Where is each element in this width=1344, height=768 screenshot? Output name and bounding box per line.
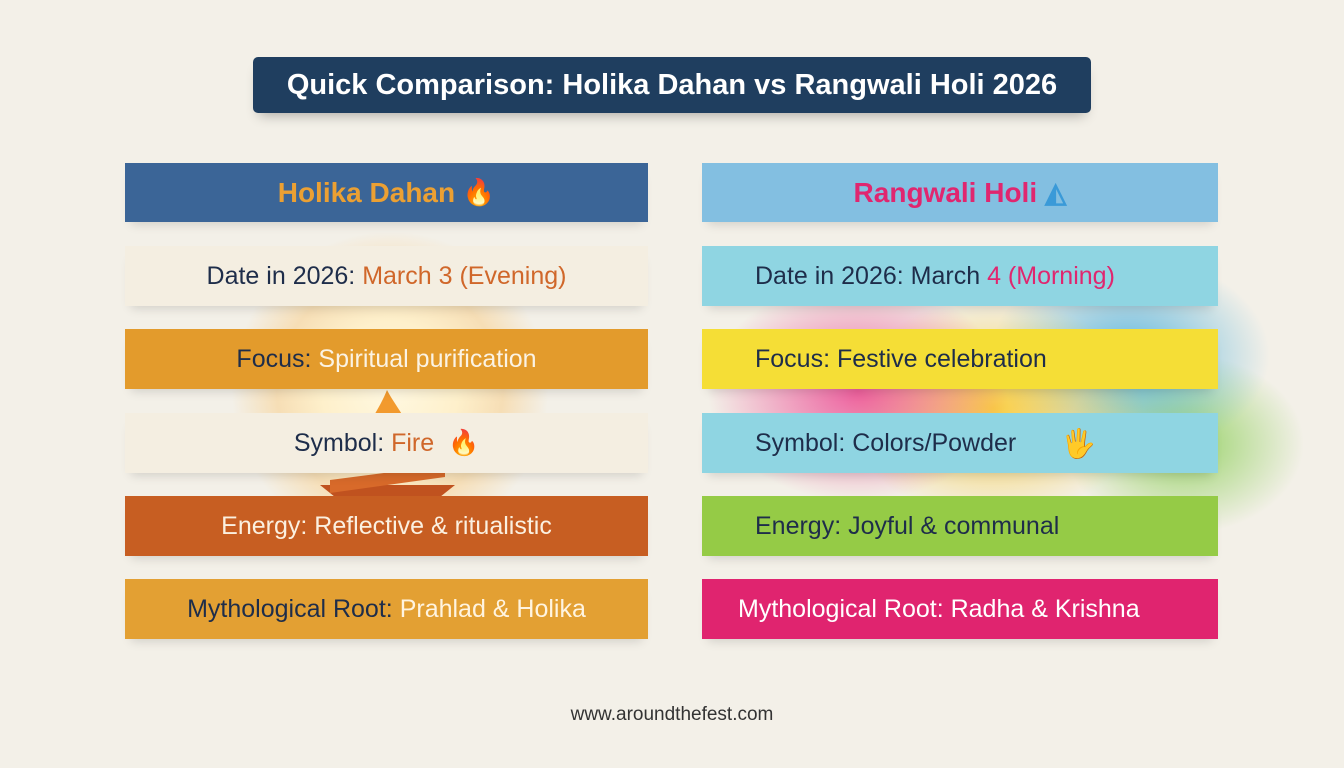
- row: energy: [702, 496, 1218, 556]
- row: symbol: Symbol: Colors/Powder: [755, 428, 1016, 456]
- row: focus: Focus:: [236, 344, 311, 372]
- row: date: 4 (Morning): [987, 262, 1115, 290]
- heading: Holika Dahan: 🔥: [463, 177, 495, 207]
- row: date: Date in 2026:: [207, 262, 355, 290]
- background glow: fire: [230, 230, 550, 550]
- heading: Rangwali Holi: Rangwali Holi: [854, 176, 1037, 208]
- row: date: [125, 246, 648, 306]
- row: mythological root: [702, 579, 1218, 639]
- row: energy: [125, 496, 648, 556]
- heading: Rangwali Holi: ◭: [1045, 177, 1066, 208]
- row: energy: Energy: Reflective & ritualistic: [221, 512, 552, 540]
- row: date: Date in 2026: March: [755, 262, 980, 290]
- panel: Rangwali Holi: [702, 163, 1218, 645]
- row: focus: [125, 329, 648, 389]
- row: symbol: Fire 🔥: [391, 428, 479, 456]
- footer url: www.aroundthefest.com: [571, 704, 773, 725]
- row: date: March 3 (Evening): [362, 262, 566, 290]
- background: color powder: [640, 180, 1320, 620]
- title: Quick Comparison: Holika Dahan vs Rangwali Holi 2026: [287, 68, 1057, 100]
- bonfire: [320, 390, 455, 496]
- row: symbol: 🖐: [1061, 428, 1096, 458]
- row: energy: Energy: Joyful & communal: [755, 512, 1059, 540]
- row: symbol: Symbol:: [294, 428, 384, 456]
- row: focus: Spiritual purification: [318, 344, 537, 372]
- row: mythological root: Mythological Root:: [187, 594, 393, 622]
- row: date: [702, 246, 1218, 306]
- row: mythological root: [125, 579, 648, 639]
- heading: Holika Dahan: Holika Dahan: [278, 176, 455, 208]
- row: focus: [702, 329, 1218, 389]
- heading: Rangwali Holi: [702, 163, 1218, 222]
- row: mythological root: Mythological Root: Radha & Krishna: [738, 594, 1140, 622]
- row: symbol: [702, 413, 1218, 473]
- title: [253, 57, 1091, 113]
- row: mythological root: Prahlad & Holika: [400, 594, 586, 622]
- panel: Holika Dahan: [125, 163, 648, 645]
- row: symbol: [125, 413, 648, 473]
- heading: Holika Dahan: [125, 163, 648, 222]
- row: focus: Focus: Festive celebration: [755, 344, 1047, 372]
